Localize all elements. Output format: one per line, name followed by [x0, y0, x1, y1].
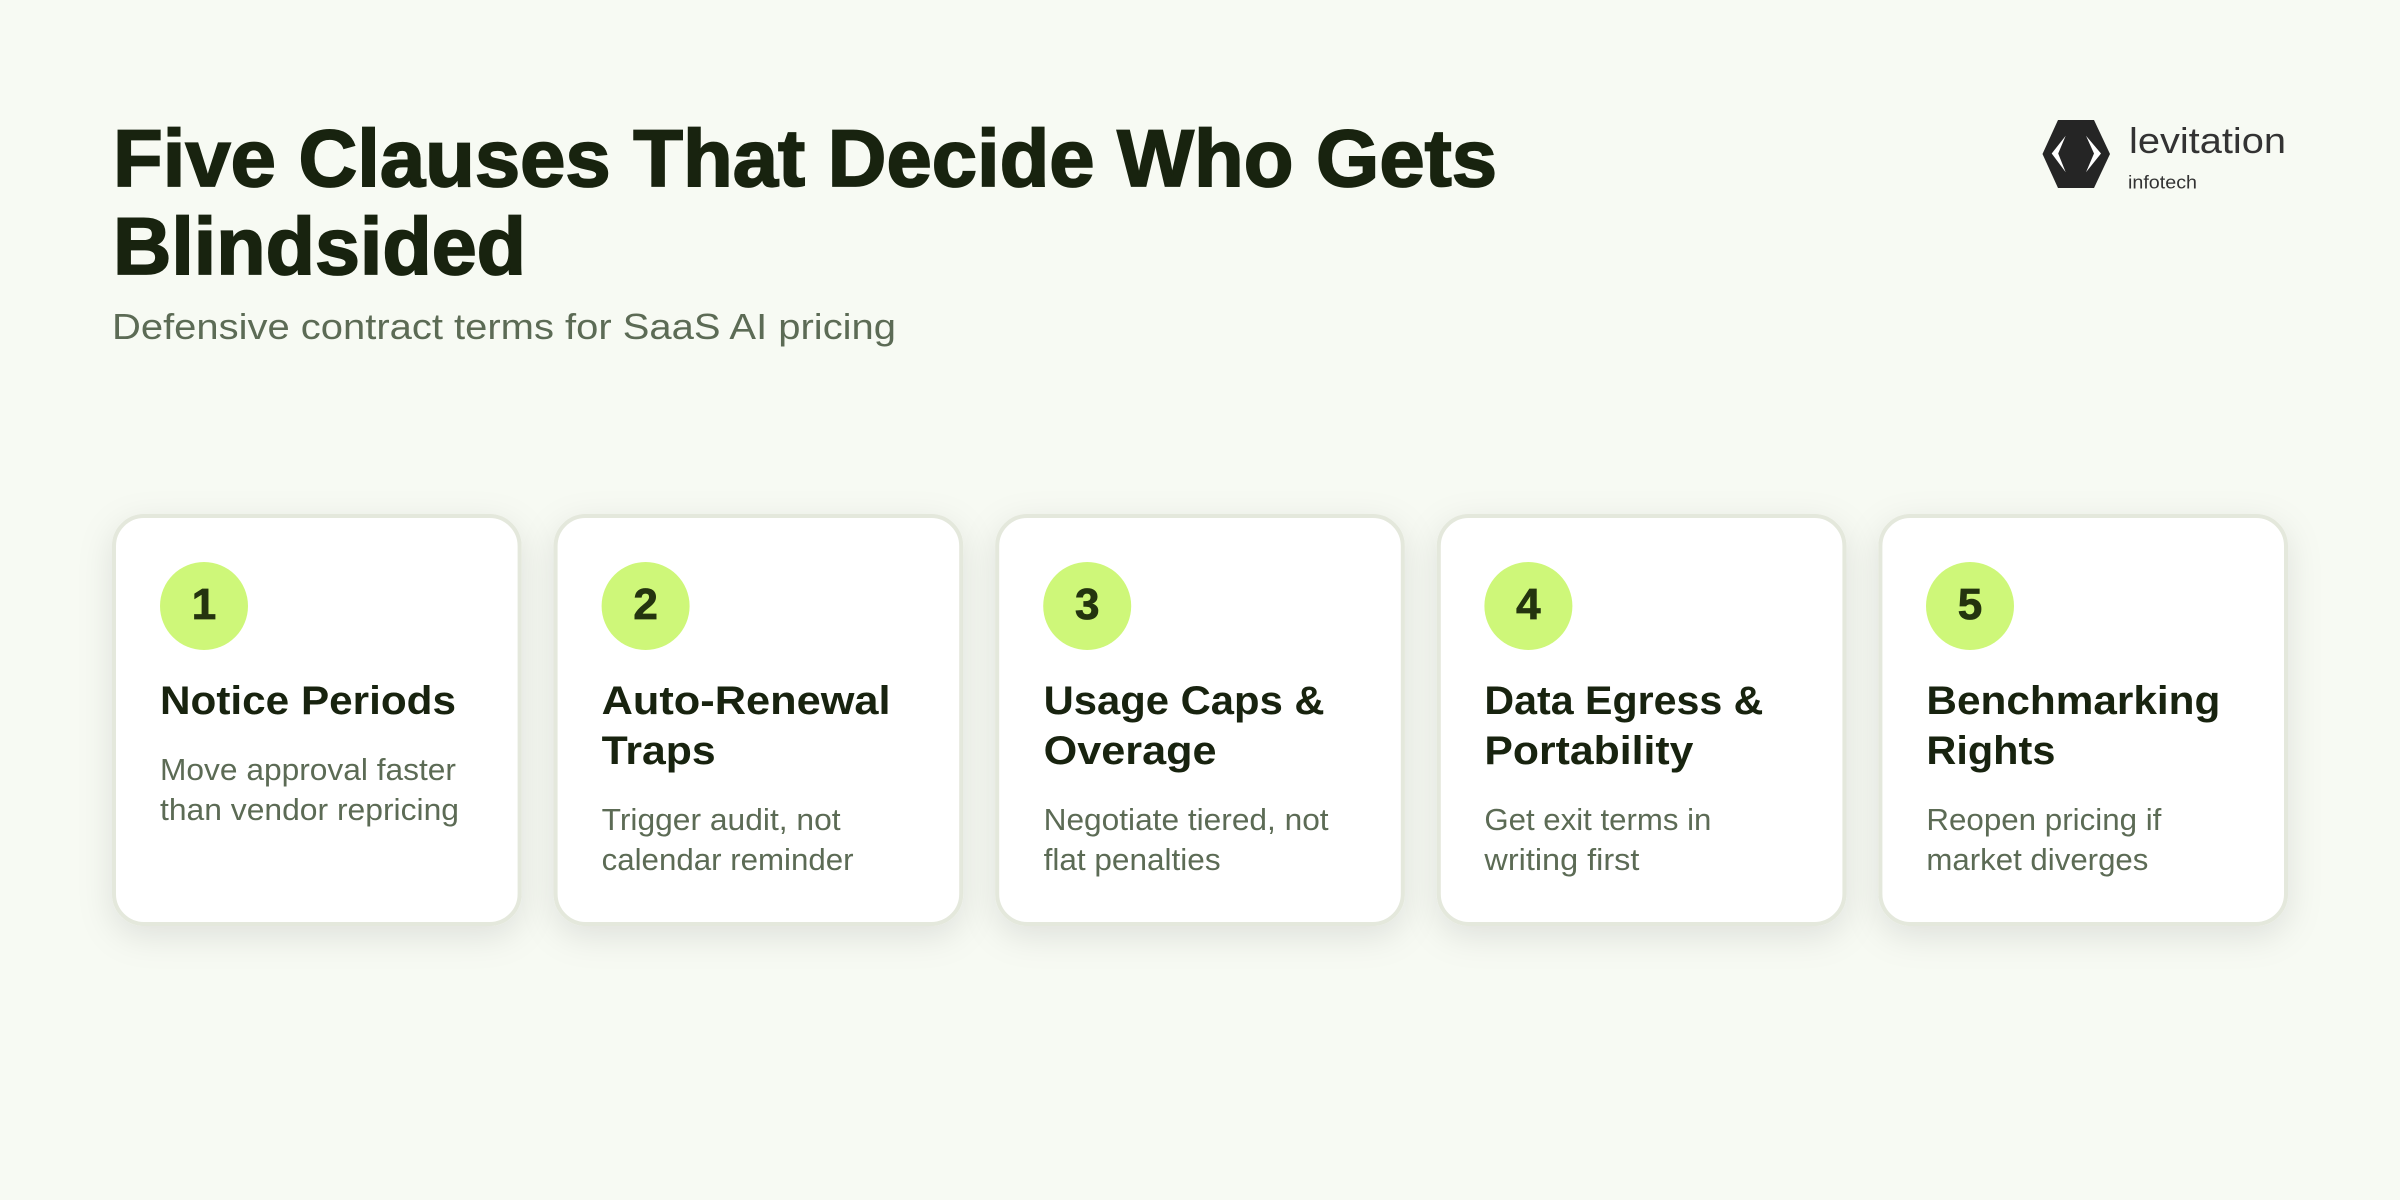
number badge 1: [160, 562, 248, 650]
title: Blindsided: [113, 202, 526, 292]
card 5 description: market diverges: [1926, 842, 2148, 877]
card 5 description: [1926, 802, 2162, 877]
card 3 description: Negotiate tiered, not: [1044, 802, 1329, 837]
card 1 heading: Notice Periods: [160, 679, 456, 723]
number badge 4: [1484, 562, 1572, 650]
number badge 5: [1926, 562, 2014, 650]
logo: levitation infotech: [2042, 120, 2286, 192]
card 3 heading: [1044, 679, 1325, 773]
number badge 3: 3: [1075, 580, 1099, 629]
number badge 5: 5: [1958, 580, 1982, 629]
panel: card 3 usage caps and overage: [997, 516, 1403, 924]
number badge 3: [1043, 562, 1131, 650]
card 3 heading: Overage: [1044, 729, 1217, 773]
card 1 description: Move approval faster: [160, 752, 456, 787]
icon: hexagon with chevrons: [2042, 120, 2110, 188]
logo subline: infotech: [2128, 172, 2197, 192]
card 2 description: calendar reminder: [602, 842, 854, 877]
card 2 description: Trigger audit, not: [602, 802, 841, 837]
panel: card 2 auto-renewal traps: [556, 516, 961, 924]
card 2 heading: Traps: [602, 729, 716, 773]
card 5 description: Reopen pricing if: [1926, 802, 2162, 837]
logo wordmark: levitation: [2129, 120, 2286, 161]
card 2 heading: [602, 679, 891, 773]
card 4 description: Get exit terms in: [1484, 802, 1711, 837]
panel: card 5 benchmarking rights: [1880, 516, 2286, 924]
card 2 heading: Auto-Renewal: [602, 679, 891, 723]
number badge 2: [602, 562, 690, 650]
card 5 heading: Rights: [1926, 729, 2055, 773]
card 3 description: [1044, 802, 1329, 877]
card 3 description: flat penalties: [1044, 842, 1221, 877]
card 4 heading: Data Egress &: [1484, 679, 1763, 723]
card 2 description: [602, 802, 854, 877]
card 4 description: writing first: [1483, 842, 1640, 877]
card 3 heading: Usage Caps &: [1044, 679, 1325, 723]
card 5 heading: Benchmarking: [1926, 679, 2220, 723]
number badge 2: 2: [633, 580, 658, 629]
subtitle: Defensive contract terms for SaaS AI pricing: [112, 306, 896, 347]
card 5 heading: [1926, 679, 2220, 773]
number badge 1: 1: [192, 580, 216, 629]
card 4 heading: [1484, 679, 1763, 773]
card 1 description: [160, 752, 459, 827]
card 4 description: [1483, 802, 1711, 877]
card 4 heading: Portability: [1484, 729, 1694, 773]
number badge 4: 4: [1516, 580, 1541, 629]
title: Five Clauses That Decide Who Gets: [113, 114, 1497, 204]
title: [113, 114, 1497, 292]
panel: card 4 data egress and portability: [1439, 516, 1844, 924]
panel: card 1 notice periods: [114, 516, 520, 924]
card 1 description: than vendor repricing: [160, 792, 459, 827]
